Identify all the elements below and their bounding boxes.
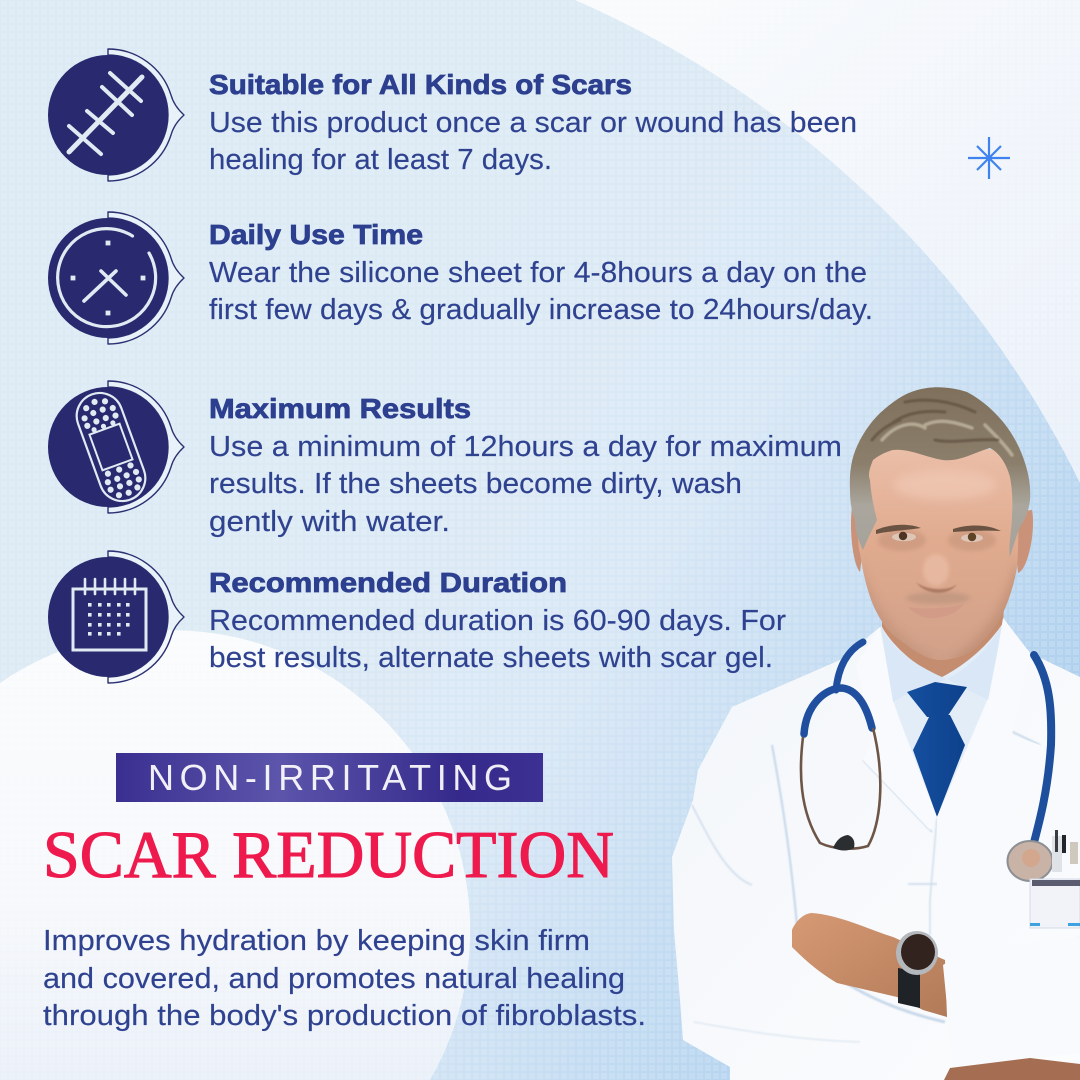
head: [850, 387, 1033, 670]
forearm: [792, 913, 947, 1017]
text: recommended duration description: [209, 605, 787, 674]
text: benefits paragraph: through the body's production of fibroblasts.: [43, 1000, 646, 1032]
neck: [882, 590, 1005, 678]
stethoscope tube: right: [1032, 655, 1051, 850]
text: benefits paragraph: [43, 925, 646, 1032]
lower sleeve: [943, 937, 1080, 1068]
doctor illustration: [672, 387, 1080, 1080]
icon: calendar: [48, 551, 184, 683]
mouth: [908, 604, 964, 618]
nose: [916, 554, 957, 593]
text: maximum results description: gently with water.: [209, 506, 450, 538]
text: scar description: healing for at least 7 days.: [209, 144, 552, 176]
stubble shadow above lip: [906, 592, 970, 604]
hair highlights: [882, 421, 1012, 455]
text: benefits paragraph: and covered, and promotes natural healing: [43, 963, 625, 995]
text: maximum results description: results. If the sheets become dirty, wash: [209, 468, 742, 500]
watch: [896, 931, 938, 1008]
ears: [851, 507, 868, 572]
stethoscope clip: [833, 835, 854, 850]
text: scar description: [209, 107, 857, 176]
title: scar reduction: SCAR REDUCTION: [43, 818, 614, 892]
icon: clock: [48, 212, 184, 344]
banner: non-irritating: NON-IRRITATING: [148, 757, 512, 798]
lower hand: [944, 1058, 1080, 1080]
eyes: [892, 532, 983, 542]
eyebrows: [876, 525, 1001, 534]
stethoscope chest piece: [1008, 841, 1052, 881]
text: benefits paragraph: Improves hydration by keeping skin firm: [43, 925, 590, 957]
shirt: [880, 623, 1003, 817]
text: maximum results description: Use a minimum of 12hours a day for maximum: [209, 431, 842, 463]
hair: [850, 387, 1030, 557]
forehead highlight: [893, 470, 997, 500]
heading: recommended duration: Recommended Duration: [209, 567, 567, 598]
icon: bandage: [48, 381, 184, 513]
stethoscope wire: [801, 728, 880, 849]
face: [858, 449, 1018, 660]
heading: suitable for all kinds of scars: Suitable for All Kinds of Scars: [209, 69, 632, 100]
icon: scar stitches: [48, 49, 184, 181]
cheek shadows: [864, 573, 924, 656]
id badge: [1030, 879, 1080, 928]
coat shading: [692, 726, 1080, 1042]
pens: [1052, 830, 1078, 872]
lab coat: [672, 618, 1080, 1080]
text: maximum results description: [209, 431, 842, 538]
right lapel: [937, 618, 1040, 922]
tie: [907, 682, 967, 817]
text: scar description: Use this product once a scar or wound has been: [209, 107, 857, 139]
text: recommended duration description: Recommended duration is 60-90 days. For: [209, 605, 787, 637]
text: daily use description: first few days & gradually increase to 24hours/day.: [209, 294, 873, 326]
collar: [881, 623, 1003, 702]
icon: sparkle star: [968, 137, 1010, 179]
heading: daily use time: Daily Use Time: [209, 219, 423, 250]
text: recommended duration description: best results, alternate sheets with scar gel.: [209, 642, 773, 674]
stethoscope tube: left: [804, 642, 872, 734]
text: daily use description: Wear the silicone sheet for 4-8hours a day on the: [209, 257, 867, 289]
text: daily use description: [209, 257, 873, 326]
heading: maximum results: Maximum Results: [209, 393, 471, 424]
hair dark strands: [872, 400, 998, 441]
left lapel: [856, 627, 937, 830]
eye sockets: [878, 529, 926, 551]
